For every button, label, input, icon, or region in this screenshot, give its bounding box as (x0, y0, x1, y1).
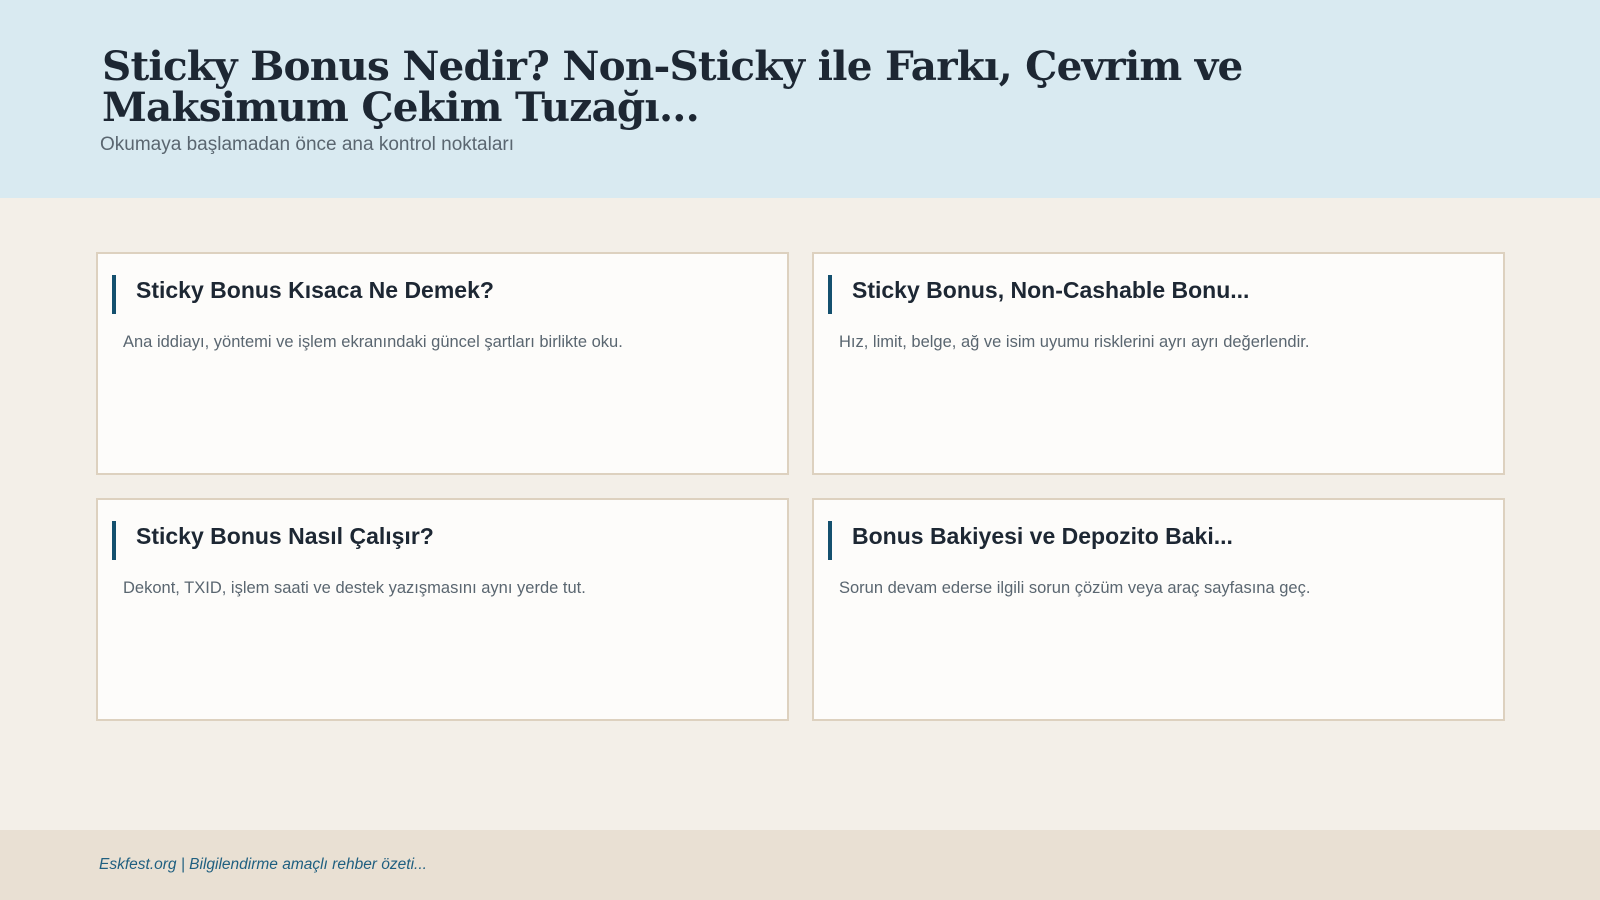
title: Maksimum Çekim Tuzağı... (102, 83, 699, 131)
panel: card 4 (812, 498, 1505, 721)
card heading: Sticky Bonus Kısaca Ne Demek? (136, 277, 494, 303)
panel: card 3 (96, 498, 789, 721)
card text: Ana iddiayı, yöntemi ve işlem ekranındaki güncel şartları birlikte oku. (123, 333, 623, 351)
accent bar (828, 275, 832, 314)
accent bar (112, 275, 116, 314)
card text: Sorun devam ederse ilgili sorun çözüm veya araç sayfasına geç. (839, 579, 1310, 597)
panel: card 2 (812, 252, 1505, 475)
accent bar (828, 521, 832, 560)
card text: Dekont, TXID, işlem saati ve destek yazışmasını aynı yerde tut. (123, 579, 586, 597)
card text: Hız, limit, belge, ağ ve isim uyumu risklerini ayrı ayrı değerlendir. (839, 333, 1309, 351)
title: Sticky Bonus Nedir? Non-Sticky ile Farkı, Çevrim ve (102, 42, 1242, 90)
footer text: Eskfest.org | Bilgilendirme amaçlı rehber özeti... (99, 856, 427, 873)
header band (0, 0, 1600, 198)
title (102, 42, 1242, 131)
card heading: Sticky Bonus, Non-Cashable Bonu... (852, 277, 1249, 303)
panel: card 1 (96, 252, 789, 475)
card heading: Sticky Bonus Nasıl Çalışır? (136, 523, 434, 549)
accent bar (112, 521, 116, 560)
subtitle: Okumaya başlamadan önce ana kontrol noktaları (100, 134, 514, 155)
footer (0, 830, 1600, 900)
card heading: Bonus Bakiyesi ve Depozito Baki... (852, 523, 1233, 549)
